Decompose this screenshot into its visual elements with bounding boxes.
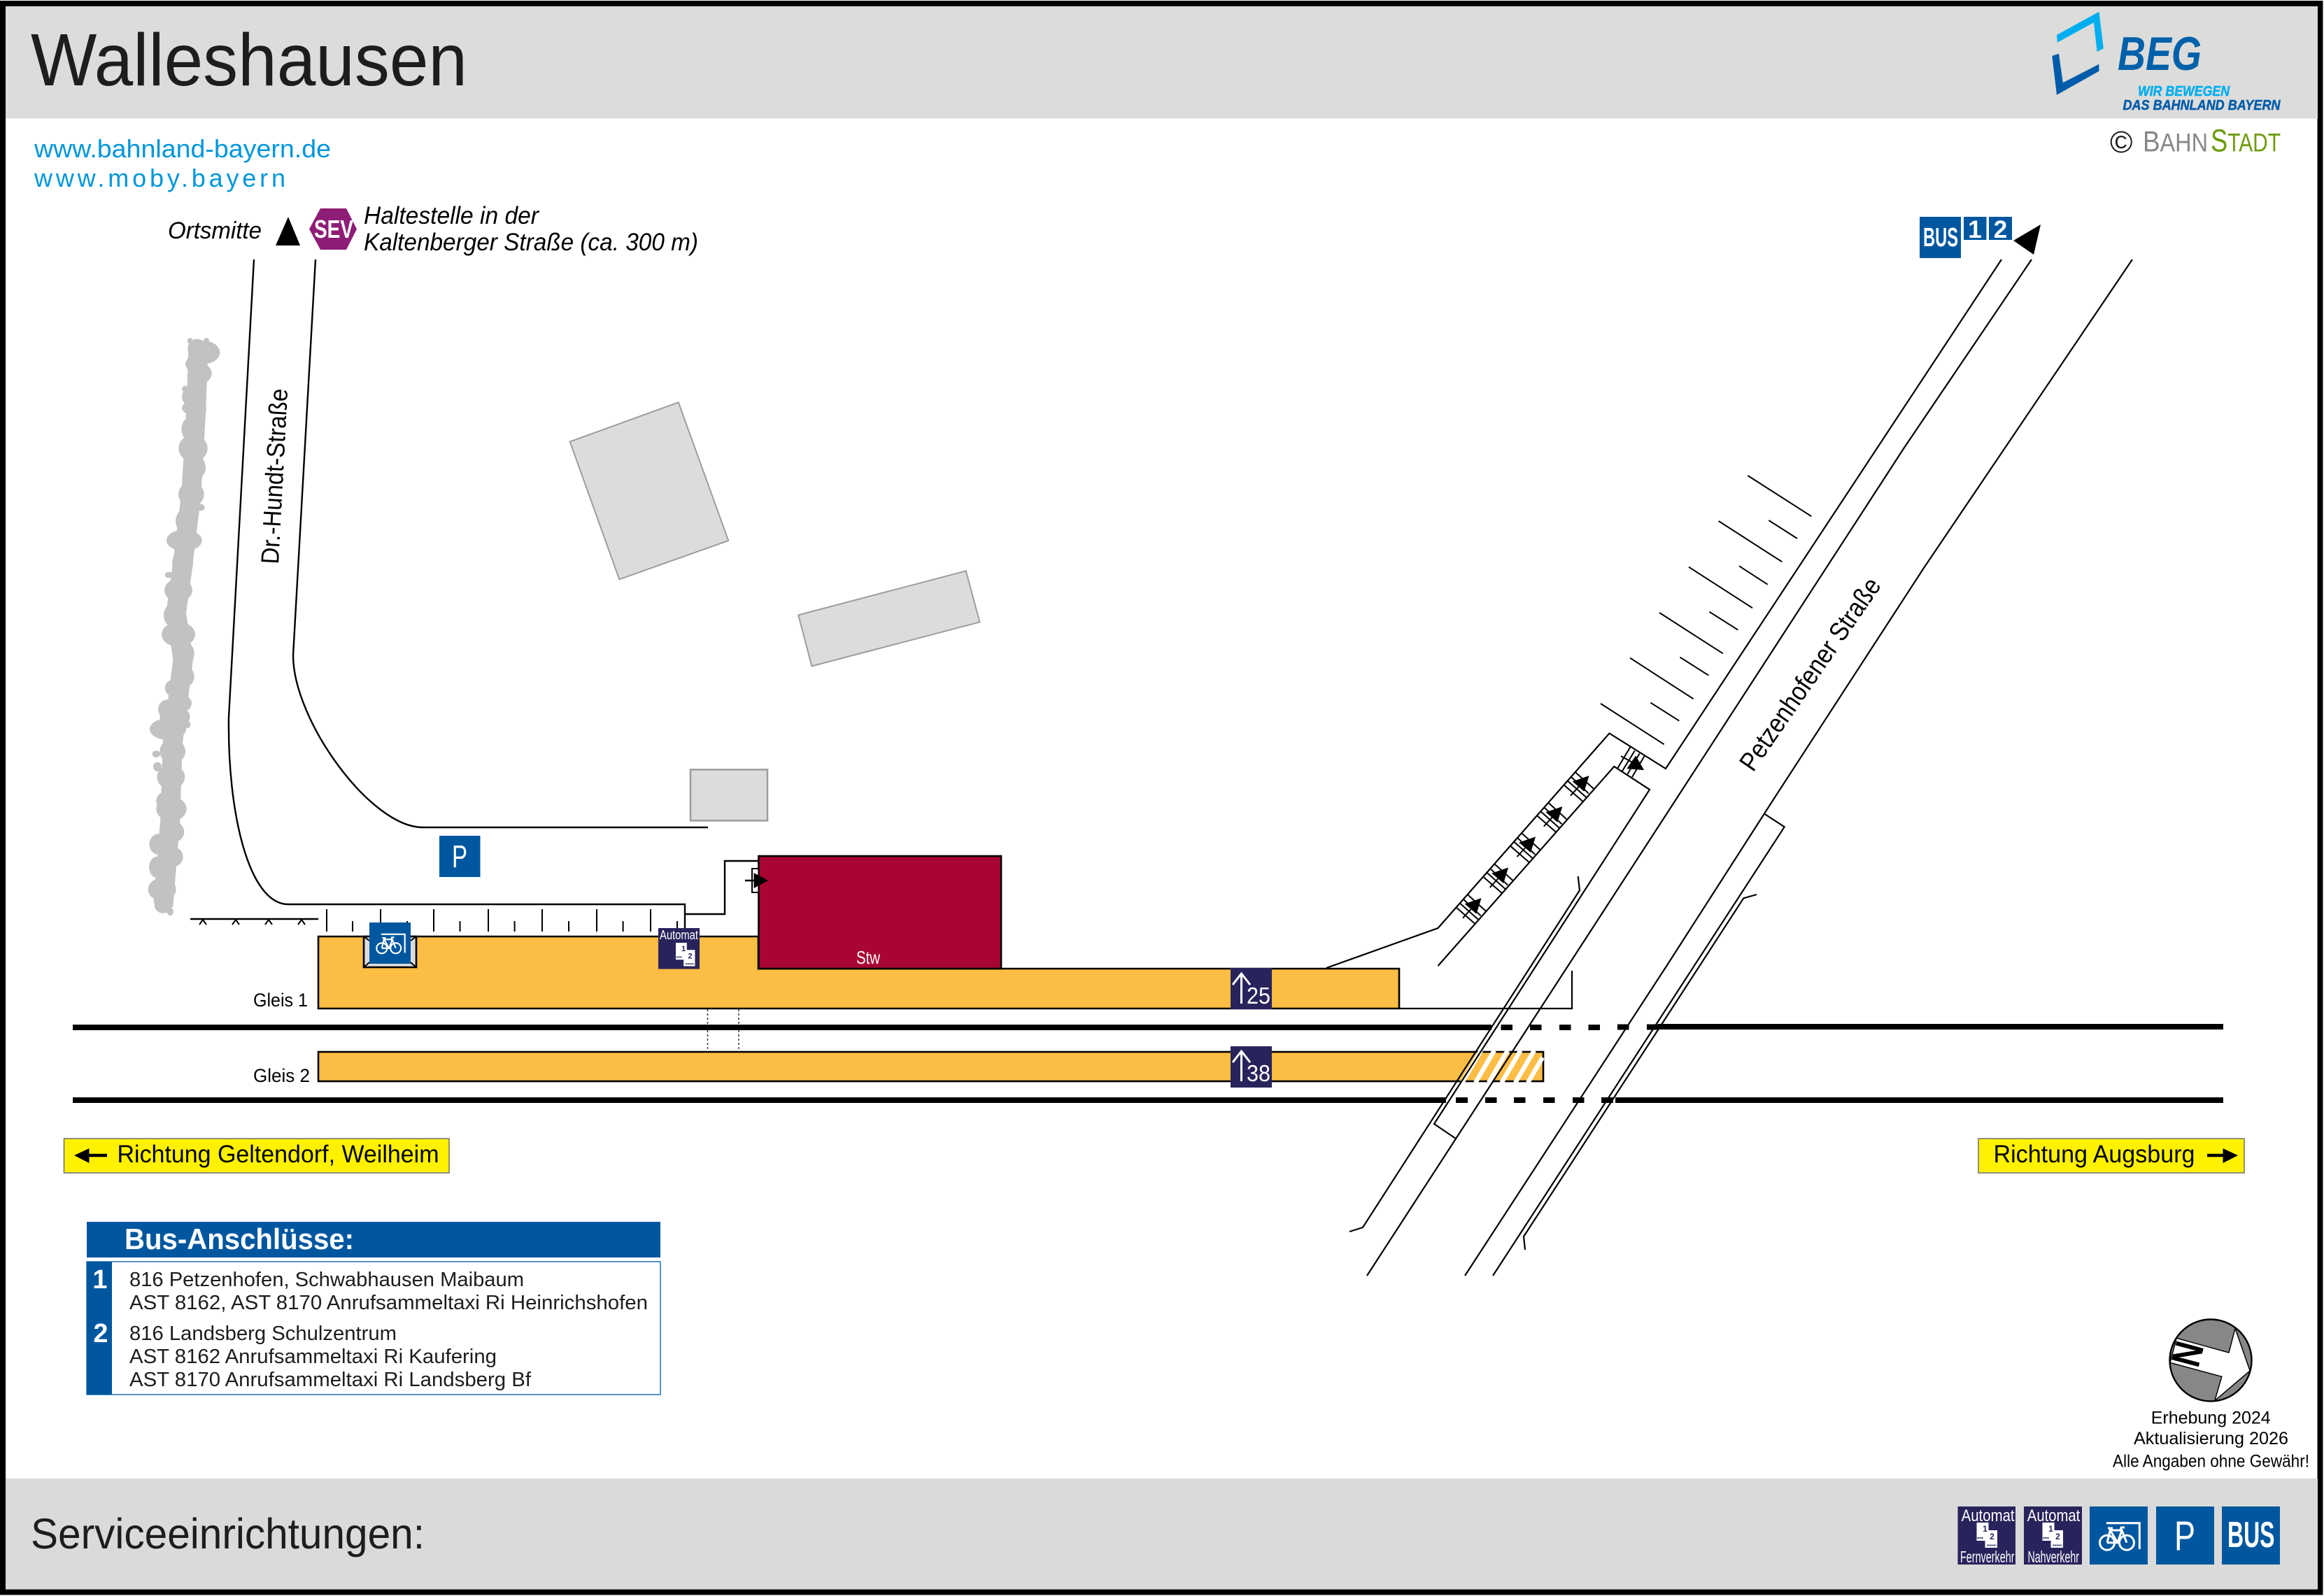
- stairs flight 1: [1456, 895, 1486, 924]
- icon: ticket machine long distance: [1957, 1506, 2015, 1566]
- closed platform hatching: [1462, 1050, 1543, 1083]
- icon: ticket machine local: [2024, 1506, 2082, 1566]
- icon: car parking: P: [2174, 1513, 2195, 1560]
- platform 1 access path: [1326, 259, 2001, 1139]
- panel: bus connections: AST 8170 Anrufsammeltaxi Ri Landsberg Bf: [129, 1369, 532, 1391]
- parking stripes along road: [1601, 476, 1811, 744]
- survey notes: Aktualisierung 2026: [2134, 1429, 2288, 1448]
- track 1: [73, 1024, 2223, 1030]
- icon: ticket machine local: 2: [2055, 1532, 2060, 1541]
- direction sign Augsburg: Richtung Augsburg: [1994, 1141, 2195, 1168]
- platform sign 25: 25: [1247, 983, 1270, 1009]
- BEG logo: BEG: [2118, 27, 2202, 80]
- Ortsmitte direction: Ortsmitte: [168, 218, 262, 244]
- road and bridge lines: Petzenhofener Straße: [1349, 259, 2132, 1276]
- signal box: Stw: [856, 947, 880, 968]
- ticket machine on platform: [658, 927, 700, 969]
- platform 1: [318, 936, 1399, 1009]
- stairs flight 5: [1564, 772, 1594, 801]
- website links: www.bahnland-bayern.de: [34, 134, 331, 163]
- panel: bus connections: 1: [92, 1265, 108, 1295]
- platform labels: [253, 990, 310, 1086]
- underpass dotted lines: [708, 1009, 739, 1052]
- stairs at signal box: [745, 869, 768, 892]
- title: Walleshausen: [31, 19, 467, 101]
- icon: bike parking: [2090, 1506, 2148, 1565]
- platform labels: Gleis 1: [253, 990, 308, 1011]
- icon: north arrow: [2162, 1319, 2251, 1402]
- header band: [6, 6, 2318, 119]
- survey notes: [2113, 1409, 2309, 1472]
- icon: bus: BUS: [2227, 1515, 2275, 1555]
- trees: [148, 338, 220, 915]
- copyright BahnStadt: [2110, 123, 2281, 159]
- SEV stop note: [309, 202, 698, 256]
- copyright BahnStadt: BAHN: [2143, 124, 2208, 158]
- ticket machine on platform: 2: [688, 952, 693, 960]
- icon: ticket machine local: 1: [2048, 1524, 2053, 1534]
- BEG logo: DAS BAHNLAND BAYERN: [2123, 98, 2281, 113]
- copyright BahnStadt: STADT: [2211, 123, 2281, 158]
- parking symbol: P: [452, 839, 467, 874]
- bus stop direction: 2: [1994, 216, 2007, 243]
- panel: bus connections: 2: [93, 1319, 108, 1348]
- stairs flight 2: [1482, 864, 1513, 893]
- footer band: [6, 1479, 2318, 1589]
- stairs flight 4: [1537, 803, 1567, 832]
- panel: bus connections: 816 Petzenhofen, Schwabhausen Maibaum: [129, 1269, 524, 1291]
- panel: bus connections: [87, 1222, 660, 1395]
- platform 2: [318, 1050, 1543, 1083]
- bus stop direction: 1: [1968, 216, 1982, 243]
- website links: www.moby.bayern: [34, 164, 285, 192]
- panel: bus connections: AST 8162 Anrufsammeltaxi Ri Kaufering: [129, 1346, 497, 1368]
- track 2: [73, 1097, 2223, 1103]
- Ortsmitte direction: [168, 217, 300, 245]
- building 2: [798, 571, 979, 666]
- bus stop direction: [1920, 216, 2041, 258]
- bike shelter: [364, 922, 416, 967]
- direction sign Geltendorf: Richtung Geltendorf, Weilheim: [118, 1141, 439, 1168]
- SEV stop note: Kaltenberger Straße (ca. 300 m): [364, 229, 698, 256]
- road: Dr.-Hundt-Straße: [229, 259, 758, 936]
- direction sign Geltendorf: [64, 1139, 449, 1173]
- ticket machine on platform: Automat: [660, 927, 698, 942]
- platform labels: Gleis 2: [253, 1065, 310, 1086]
- icon: ticket machine long distance: 2: [1990, 1532, 1994, 1541]
- platform sign 25: [1231, 968, 1272, 1009]
- BEG logo: WIR BEWEGEN: [2138, 84, 2230, 99]
- bus stop direction: BUS: [1923, 223, 1958, 252]
- ticket machine on platform: 1: [681, 945, 686, 953]
- building 1: [570, 402, 728, 579]
- street name Dr.-Hundt-Straße: Dr.-Hundt-Straße: [255, 388, 293, 564]
- icon: ticket machine long distance: Automat: [1962, 1506, 2015, 1525]
- panel: bus connections: 816 Landsberg Schulzentrum: [129, 1323, 397, 1345]
- icon: north arrow: N: [2162, 1337, 2212, 1371]
- stairs to street: [1617, 747, 1645, 777]
- fence marks: [190, 909, 677, 932]
- footer heading: Serviceeinrichtungen:: [31, 1510, 425, 1558]
- SEV stop note: Haltestelle in der: [364, 202, 539, 229]
- building 3: [690, 769, 767, 820]
- icon: ticket machine long distance: Fernverkehr: [1960, 1548, 2015, 1566]
- signal box: [758, 856, 1001, 969]
- stairs flight 3: [1510, 834, 1540, 862]
- parking symbol: [439, 836, 480, 877]
- icon: car parking: [2156, 1506, 2214, 1565]
- panel: bus connections: AST 8162, AST 8170 Anrufsammeltaxi Ri Heinrichshofen: [129, 1292, 648, 1314]
- icon: ticket machine local: Automat: [2027, 1506, 2081, 1525]
- survey notes: Erhebung 2024: [2151, 1409, 2271, 1428]
- street name Petzenhofener Straße: Petzenhofener Straße: [1734, 572, 1887, 776]
- icon: ticket machine long distance: 1: [1983, 1524, 1988, 1534]
- platform sign 38: [1231, 1046, 1272, 1088]
- BEG logo: [2052, 12, 2281, 113]
- platform sign 38: 38: [1247, 1060, 1270, 1086]
- website links: [34, 134, 331, 192]
- direction sign Augsburg: [1978, 1139, 2244, 1173]
- icon: ticket machine local: Nahverkehr: [2027, 1548, 2079, 1566]
- copyright BahnStadt: ©: [2110, 125, 2132, 159]
- icon: bus: [2222, 1506, 2280, 1565]
- SEV stop note: SEV: [314, 215, 353, 243]
- panel: bus connections: Bus-Anschlüsse:: [125, 1223, 354, 1255]
